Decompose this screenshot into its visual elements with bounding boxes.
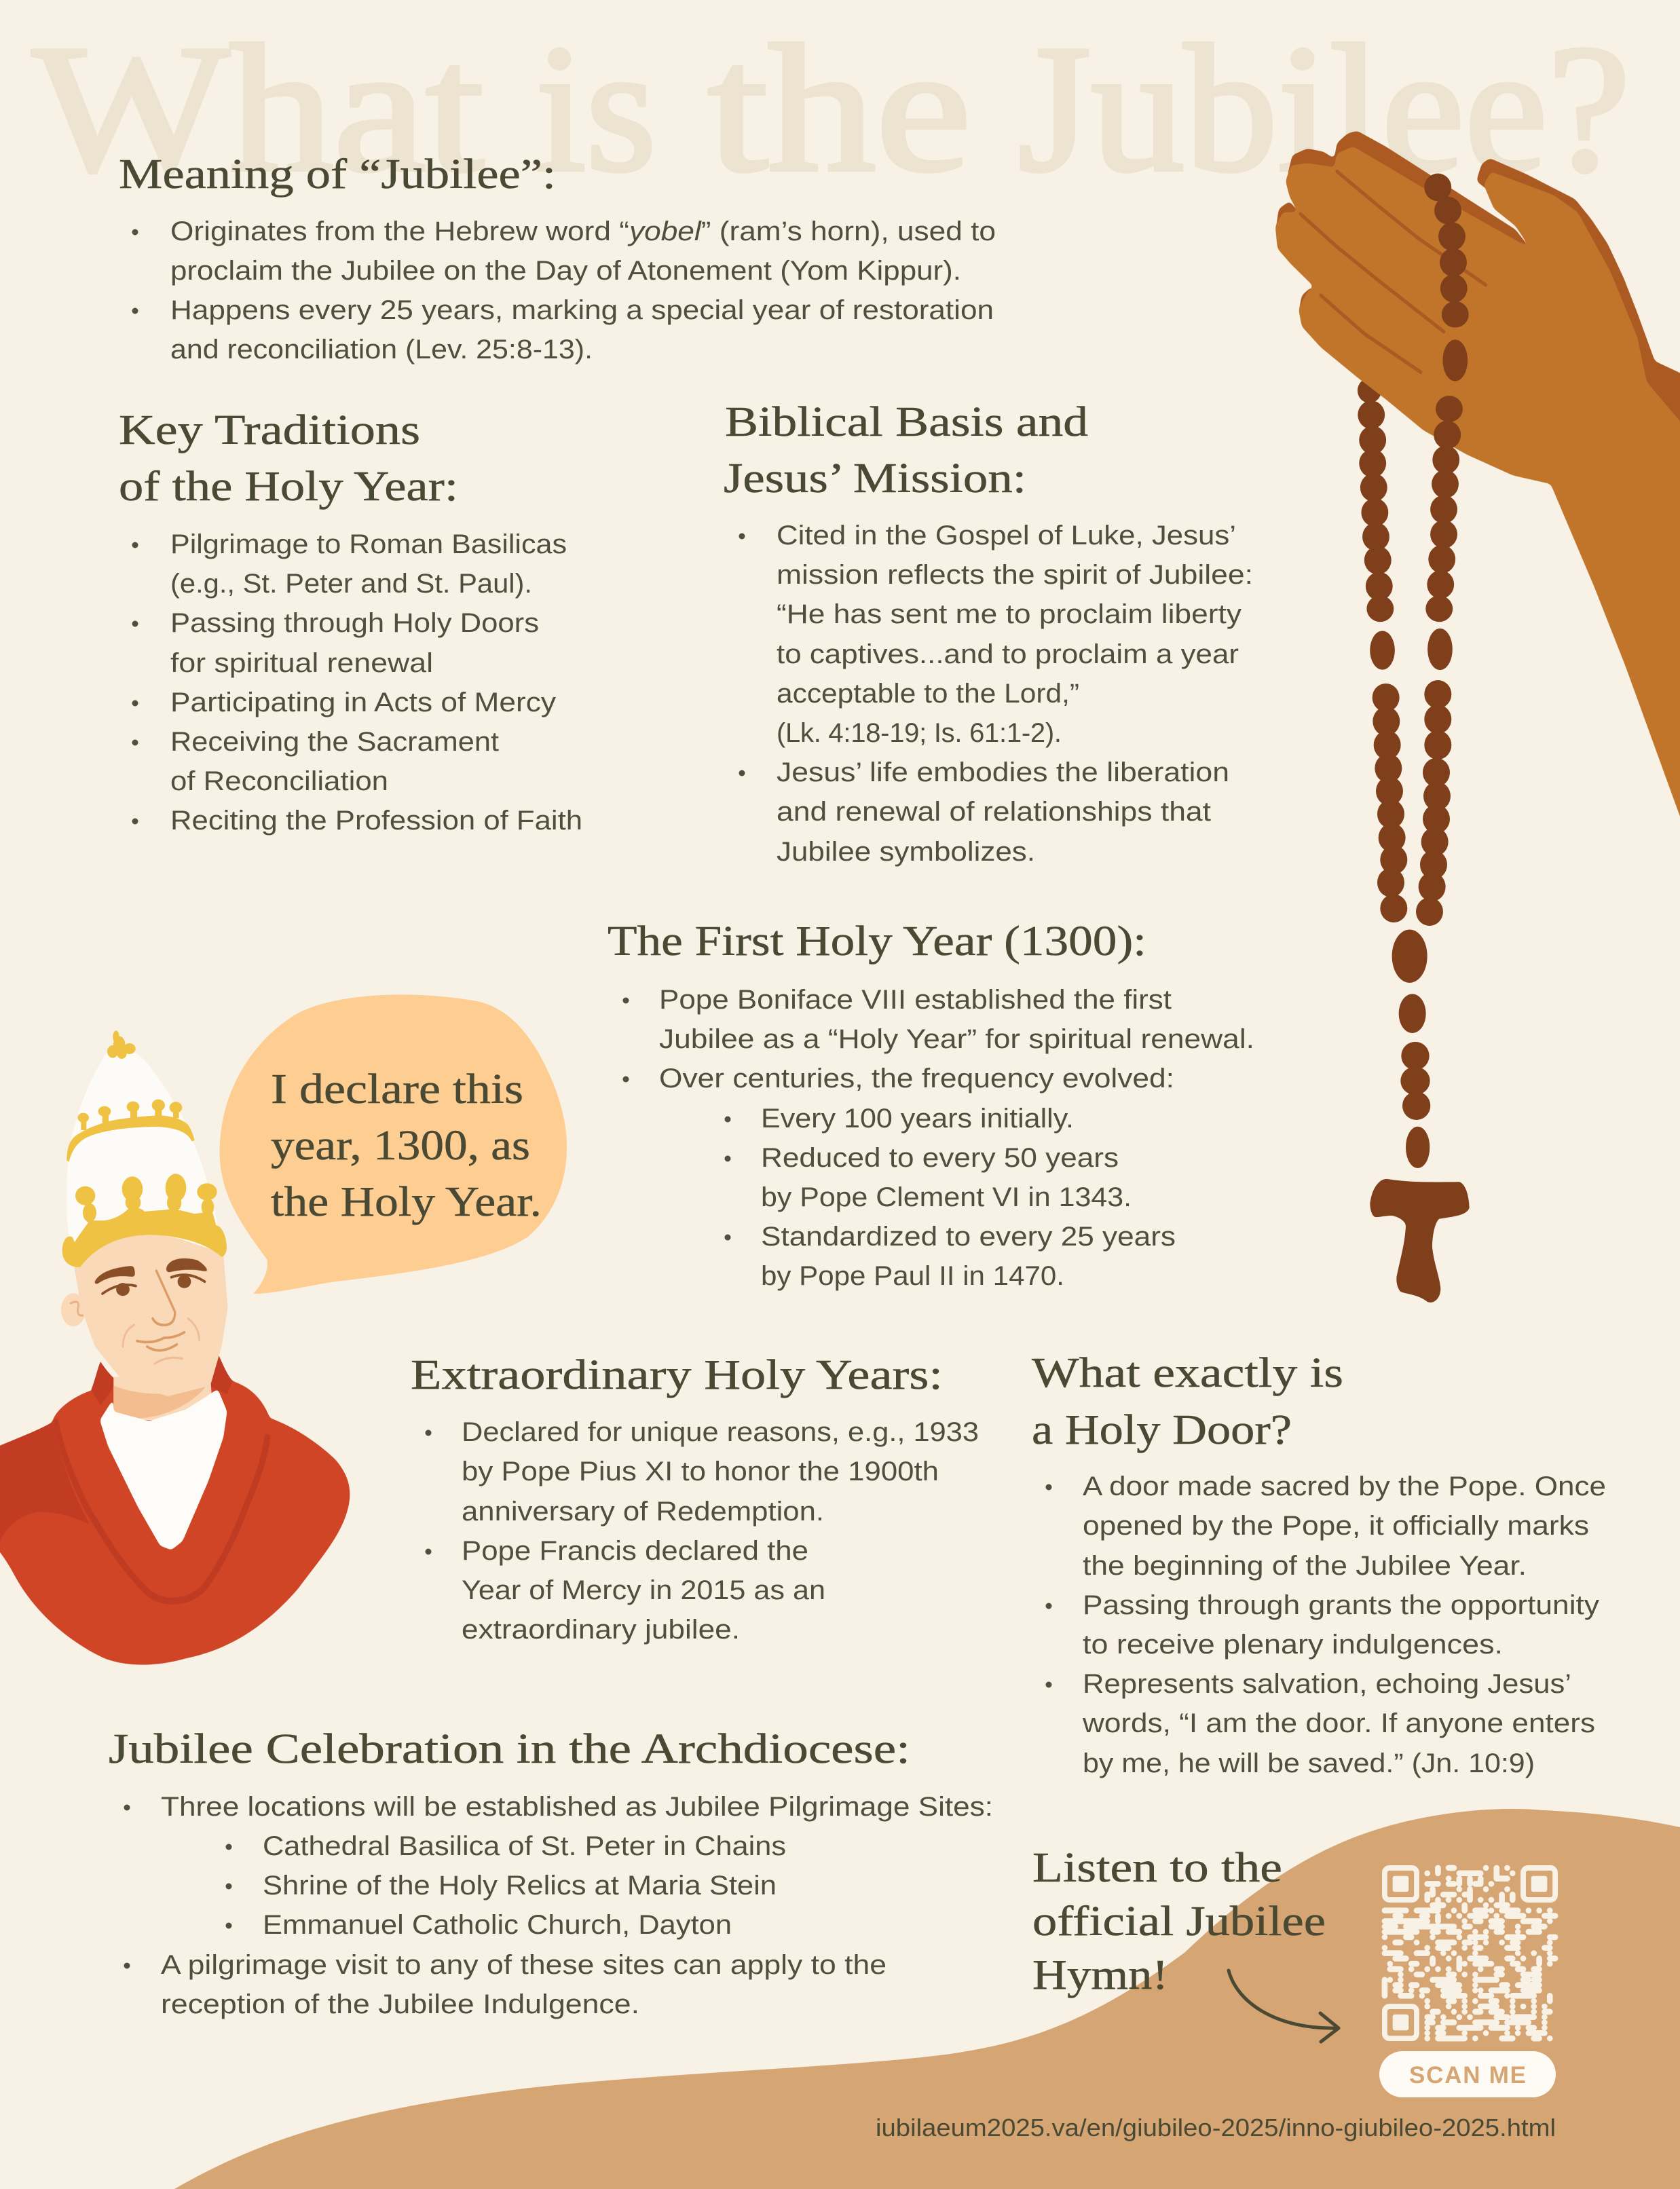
heading — [119, 407, 458, 510]
bullet list: reception of the Jubilee Indulgence. — [161, 1989, 639, 2019]
bullet list: Declared for unique reasons, e.g., 1933 — [462, 1417, 979, 1447]
bullet list: Represents salvation, echoing Jesus’ — [1083, 1669, 1571, 1699]
bullet list: Pope Francis declared the — [462, 1536, 808, 1566]
bullet list: Reciting the Profession of Faith — [170, 806, 582, 836]
bullet list: “He has sent me to proclaim liberty — [777, 599, 1242, 629]
heading: official Jubilee — [1032, 1898, 1326, 1945]
scan me pill: SCAN ME — [1409, 2062, 1526, 2089]
face — [71, 1232, 228, 1396]
section: First Holy Year — [608, 918, 1254, 1291]
bullet list — [132, 217, 996, 364]
bullet list — [132, 529, 582, 836]
heading: Extraordinary Holy Years: — [411, 1352, 943, 1398]
arrow — [1229, 1970, 1339, 2042]
rosary left strand — [1358, 378, 1395, 670]
bullet list: opened by the Pope, it officially marks — [1083, 1511, 1589, 1541]
bullet list — [739, 521, 1253, 867]
section: Meaning of Jubilee — [119, 151, 996, 364]
section: Holy Door — [1032, 1350, 1606, 1778]
bullet list: and renewal of relationships that — [777, 797, 1211, 827]
bullet list: (Lk. 4:18-19; Is. 61:1-2). — [777, 718, 1062, 748]
lower crown — [62, 1174, 227, 1267]
bullet list — [124, 1792, 993, 2019]
heading: a Holy Door? — [1032, 1407, 1292, 1453]
bullet list: A pilgrimage visit to any of these sites can apply to the — [161, 1950, 886, 1980]
ear — [61, 1293, 86, 1326]
speech bubble text: the Holy Year. — [271, 1179, 542, 1225]
bullet list — [1045, 1472, 1606, 1778]
bullet list: by Pope Clement VI in 1343. — [761, 1182, 1132, 1212]
bullet list: the beginning of the Jubilee Year. — [1083, 1551, 1527, 1581]
bullet list: by Pope Pius XI to honor the 1900th — [462, 1457, 939, 1486]
bullet list: Pope Boniface VIII established the first — [659, 985, 1172, 1015]
section: Extraordinary Holy Years — [411, 1352, 979, 1645]
bullet list: mission reflects the spirit of Jubilee: — [777, 560, 1253, 590]
bullet list: Three locations will be established as Jubilee Pilgrimage Sites: — [161, 1792, 993, 1822]
heading: The First Holy Year (1300): — [608, 918, 1146, 965]
bullet list: Cathedral Basilica of St. Peter in Chains — [263, 1831, 786, 1861]
speech bubble text: I declare this — [271, 1066, 523, 1112]
bullet list: to captives...and to proclaim a year — [777, 639, 1239, 669]
bullet list — [425, 1417, 979, 1645]
section: Jubilee Celebration in the Archdiocese — [109, 1726, 993, 2019]
bullet list: Jesus’ life embodies the liberation — [777, 757, 1229, 787]
hand — [1275, 131, 1680, 870]
speech bubble text: year, 1300, as — [271, 1123, 530, 1169]
background title: Jubilee? — [1018, 7, 1630, 209]
tiara gold crowns — [62, 1030, 227, 1267]
scan me pill — [1379, 2051, 1556, 2097]
bullet list: Year of Mercy in 2015 as an — [462, 1575, 825, 1605]
heading: Meaning of “Jubilee”: — [119, 151, 556, 198]
background title: the — [708, 7, 971, 209]
heading: Jubilee Celebration in the Archdiocese: — [109, 1726, 910, 1772]
top ornament — [107, 1030, 136, 1059]
bullet list: proclaim the Jubilee on the Day of Atonement (Yom Kippur). — [170, 256, 961, 286]
bottom wave background — [174, 1809, 1680, 2189]
bullet list: Reduced to every 50 years — [761, 1143, 1119, 1173]
bullet list: anniversary of Redemption. — [462, 1497, 824, 1527]
background title: What — [33, 7, 485, 209]
heading: Hymn! — [1032, 1952, 1168, 1998]
bullet list: acceptable to the Lord,” — [777, 679, 1079, 709]
bullet list: (e.g., St. Peter and St. Paul). — [170, 569, 532, 599]
heading: Biblical Basis and — [725, 399, 1088, 445]
heading: of the Holy Year: — [119, 464, 458, 510]
bullet list: Cited in the Gospel of Luke, Jesus’ — [777, 521, 1236, 550]
bullet list: Every 100 years initially. — [761, 1104, 1074, 1134]
bullet list: Jubilee as a “Holy Year” for spiritual renewal. — [659, 1024, 1254, 1054]
heading — [724, 399, 1088, 502]
bullet list: A door made sacred by the Pope. Once — [1083, 1472, 1606, 1501]
heading: Jesus’ Mission: — [724, 455, 1026, 502]
illustration: praying hand holding rosary — [1275, 131, 1680, 1302]
QR code — [1385, 1868, 1555, 2038]
bullet list: Pilgrimage to Roman Basilicas — [170, 529, 567, 559]
heading — [1032, 1350, 1343, 1453]
illustration: pope with tiara — [0, 1030, 350, 1665]
pope body and head — [0, 1043, 350, 1665]
heading — [1032, 1845, 1326, 1998]
bullet list: Emmanuel Catholic Church, Dayton — [263, 1910, 732, 1940]
bullet list: by Pope Paul II in 1470. — [761, 1261, 1064, 1291]
background title: is — [536, 7, 656, 209]
bullet list: Passing through grants the opportunity — [1083, 1590, 1599, 1620]
bullet list — [623, 985, 1254, 1291]
background title — [33, 7, 1630, 209]
white undergarment — [100, 1389, 227, 1550]
bullet list: to receive plenary indulgences. — [1083, 1630, 1503, 1660]
bullet list: Jubilee symbolizes. — [777, 837, 1035, 867]
section: Biblical Basis — [724, 399, 1253, 867]
robe — [0, 1353, 350, 1665]
section: hymn call to action — [876, 1845, 1556, 2141]
bullet list: for spiritual renewal — [170, 648, 433, 678]
tiara white cone — [67, 1043, 220, 1265]
bullet list: Passing through Holy Doors — [170, 608, 539, 638]
bullet list: Shrine of the Holy Relics at Maria Stein — [263, 1871, 777, 1901]
bullet list: extraordinary jubilee. — [462, 1615, 740, 1645]
bullet list: Over centuries, the frequency evolved: — [659, 1064, 1174, 1093]
bullet list: Standardized to every 25 years — [761, 1222, 1176, 1252]
bullet list: Participating in Acts of Mercy — [170, 688, 556, 717]
neck — [113, 1377, 212, 1420]
rosary lower strands, pendant and tau cross — [1370, 680, 1469, 1302]
heading: Key Traditions — [119, 407, 420, 453]
speech bubble — [220, 994, 567, 1294]
rosary right strand — [1424, 174, 1469, 670]
bullet list: by me, he will be saved.” (Jn. 10:9) — [1083, 1748, 1535, 1778]
bullet list: Originates from the Hebrew word “ yobel ” (ram’s horn), used to — [170, 217, 996, 246]
bullet list: and reconciliation (Lev. 25:8-13). — [170, 335, 593, 364]
heading: What exactly is — [1032, 1350, 1343, 1396]
bullet list: of Reconciliation — [170, 766, 388, 796]
bullet list: Happens every 25 years, marking a special year of restoration — [170, 295, 994, 325]
bullet list: words, “I am the door. If anyone enters — [1082, 1708, 1595, 1738]
speech bubble text — [271, 1066, 542, 1225]
section: Key Traditions — [119, 407, 582, 836]
middle crown — [67, 1100, 195, 1162]
bullet list: Receiving the Sacrament — [170, 727, 499, 757]
hymn URL: iubilaeum2025.va/en/giubileo-2025/inno-giubileo-2025.html — [876, 2114, 1556, 2141]
heading: Listen to the — [1032, 1845, 1282, 1891]
